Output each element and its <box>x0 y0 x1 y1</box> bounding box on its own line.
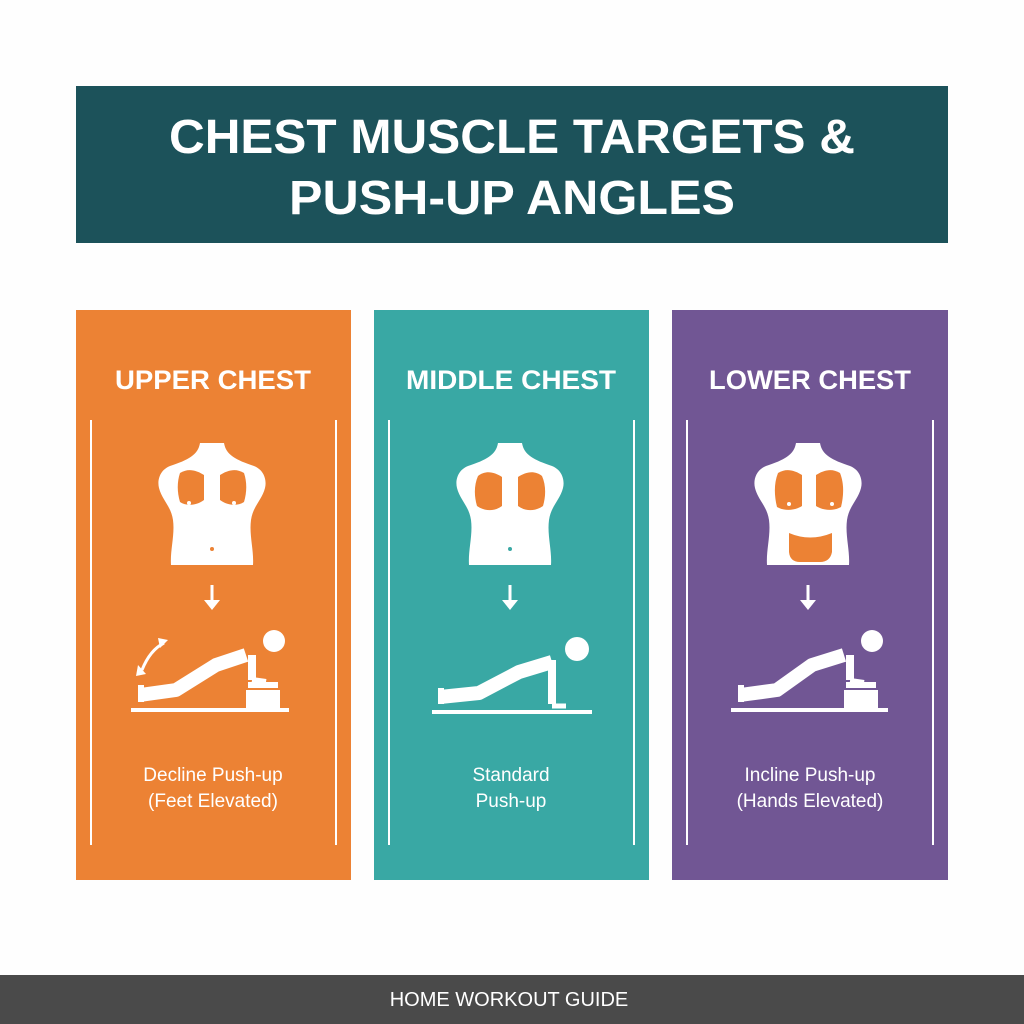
title banner <box>76 86 948 243</box>
icon: standard push-up <box>432 637 592 712</box>
title banner: CHEST MUSCLE TARGETS & <box>169 111 855 164</box>
panel: lower chest <box>672 310 948 880</box>
panel: middle chest <box>374 310 649 880</box>
icon: torso upper <box>158 443 266 565</box>
arrow <box>204 585 220 610</box>
heading: middle chest: MIDDLE CHEST <box>406 365 617 395</box>
icon: decline push-up <box>131 630 289 710</box>
icon: incline push-up <box>731 630 888 710</box>
panel: upper chest <box>76 310 351 880</box>
title banner: PUSH-UP ANGLES <box>289 172 735 225</box>
panel: lower chest: (Hands Elevated) <box>737 791 883 812</box>
footer: HOME WORKOUT GUIDE <box>390 989 628 1011</box>
panel: upper chest: (Feet Elevated) <box>148 791 278 812</box>
heading: upper chest: UPPER CHEST <box>115 365 312 395</box>
icon: torso middle <box>456 443 564 565</box>
heading: lower chest: LOWER CHEST <box>709 365 912 395</box>
arrow <box>800 585 816 610</box>
icon: torso lower <box>754 443 862 565</box>
panel: middle chest: Push-up <box>476 791 546 812</box>
label: standard push-up: Standard <box>472 765 550 786</box>
label: incline push-up: Incline Push-up <box>745 765 875 786</box>
footer <box>0 975 1024 1024</box>
arrow <box>502 585 518 610</box>
label: decline push-up: Decline Push-up <box>143 765 283 786</box>
